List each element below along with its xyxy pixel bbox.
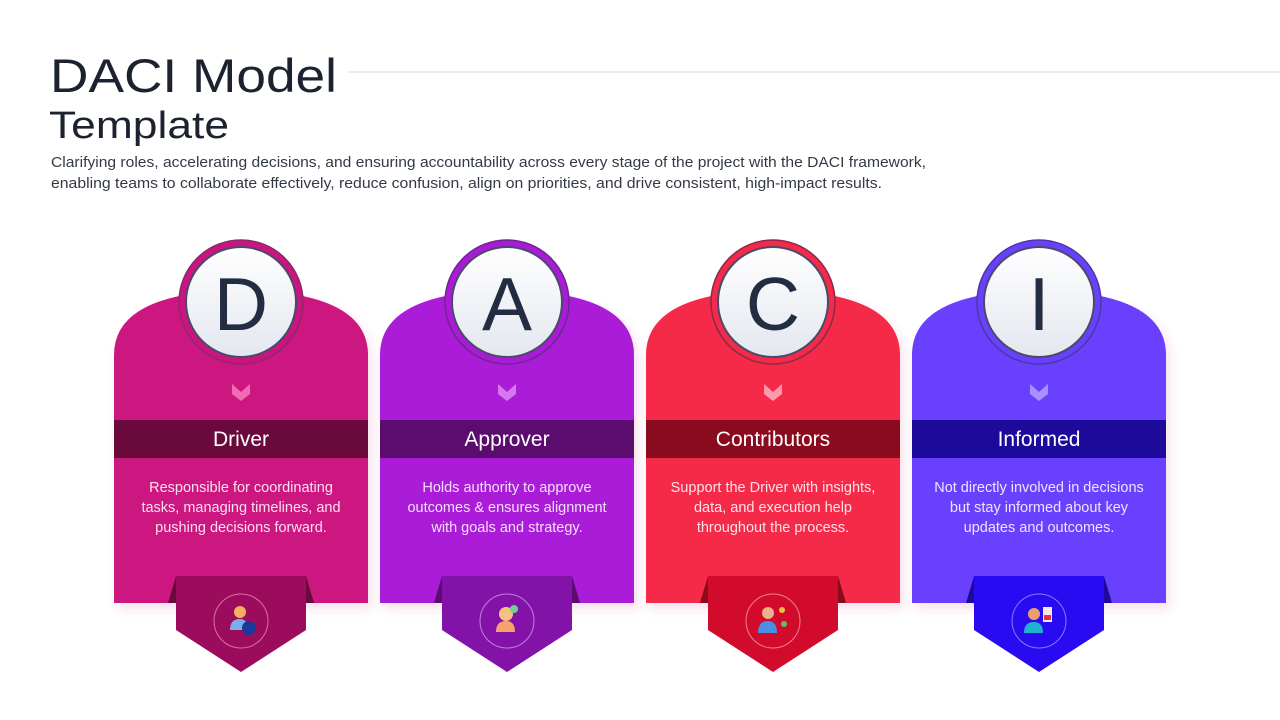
band: Driver: Driver: [213, 428, 269, 451]
letter circle I: I: [1029, 262, 1049, 346]
ribbon with icon: [700, 576, 846, 672]
icon: chevron: [1030, 384, 1048, 401]
description: [671, 480, 875, 536]
description: with goals and strategy.: [430, 520, 583, 536]
band: Approver: Approver: [464, 428, 550, 451]
card: Informed: [912, 240, 1166, 672]
icon: chevron: [498, 384, 516, 401]
card: Approver: [380, 240, 634, 672]
description: data, and execution help: [694, 500, 852, 516]
ribbon with icon: [966, 576, 1112, 672]
description: tasks, managing timelines, and: [141, 500, 341, 516]
title: DACI Model: [50, 49, 337, 102]
band: Informed: [912, 420, 1166, 458]
subtitle text: [51, 155, 926, 192]
band: Informed: Informed: [998, 428, 1080, 451]
band: Approver: [380, 420, 634, 458]
icon: chevron: [232, 384, 250, 401]
ribbon with icon: [168, 576, 314, 672]
description: updates and outcomes.: [964, 520, 1114, 536]
description: pushing decisions forward.: [155, 520, 327, 536]
subtitle text: Clarifying roles, accelerating decisions, and ensuring accountability across every stage of the project with the DACI framework,: [51, 155, 926, 171]
description: but stay informed about key: [950, 500, 1129, 516]
band: Contributors: [646, 420, 900, 458]
description: outcomes & ensures alignment: [407, 500, 607, 516]
card: Contributors: [646, 240, 900, 672]
letter circle I: [977, 240, 1101, 364]
letter circle D: D: [214, 262, 268, 346]
letter circle C: [711, 240, 835, 364]
letter circle D: [179, 240, 303, 364]
title: [49, 49, 337, 147]
ribbon with icon: [434, 576, 580, 672]
band: Driver: [114, 420, 368, 458]
description: [407, 480, 607, 536]
icon: chevron: [764, 384, 782, 401]
letter circle C: C: [746, 262, 800, 346]
description: Support the Driver with insights,: [671, 480, 875, 496]
description: Holds authority to approve: [422, 480, 592, 496]
description: [934, 480, 1144, 536]
description: Not directly involved in decisions: [934, 480, 1144, 496]
letter circle A: [445, 240, 569, 364]
band: Contributors: Contributors: [716, 428, 830, 451]
letter circle A: A: [482, 262, 532, 346]
description: throughout the process.: [697, 520, 849, 536]
subtitle text: enabling teams to collaborate effectively, reduce confusion, align on priorities, and drive consistent, high-impact results.: [51, 176, 882, 192]
card: Driver: [114, 240, 368, 672]
description: [141, 480, 341, 536]
description: Responsible for coordinating: [149, 480, 333, 496]
title: Template: [49, 105, 229, 147]
